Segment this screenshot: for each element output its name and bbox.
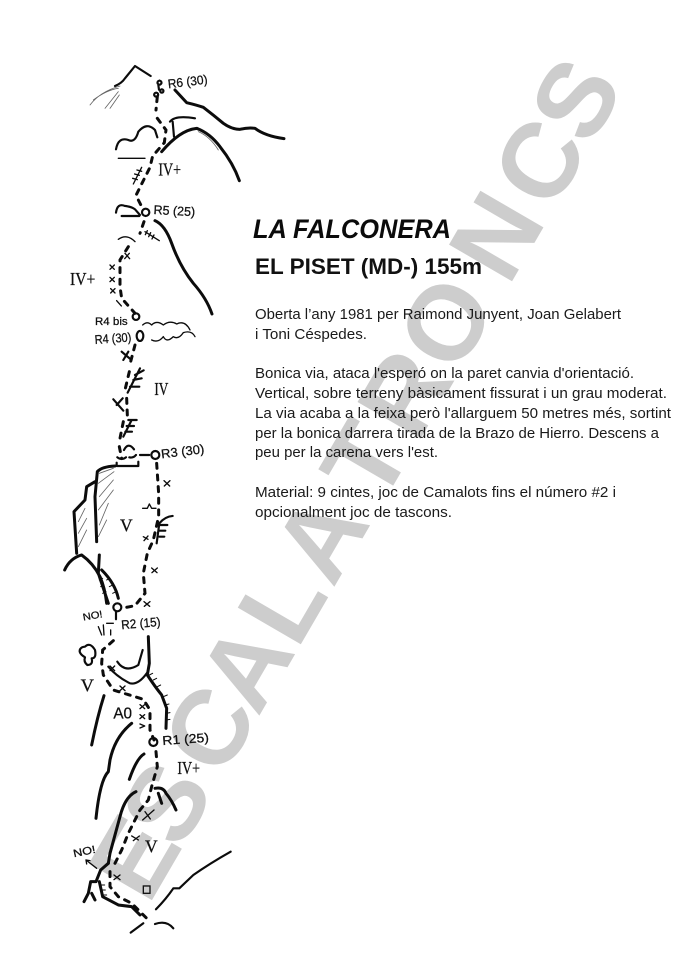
route: R3 to R2 <box>127 463 159 607</box>
topo: lower section <box>72 637 231 933</box>
label: R2 belay: R2 (15) <box>121 615 161 632</box>
left wall lines <box>92 696 144 863</box>
label: R1 belay: R1 (25) <box>162 731 209 748</box>
icon: R2 ring <box>113 603 121 611</box>
icon: summit ridge <box>90 66 151 108</box>
text block: description: Bonica via, ataca l'esperó on la paret canvia d'orientació. <box>255 365 634 382</box>
summit terraces <box>116 117 195 149</box>
label: R4: R4 (30) <box>94 330 132 347</box>
ledge R4 bis <box>143 322 190 330</box>
title: LA FALCONERA <box>253 214 451 244</box>
label: R3 belay: R3 (30) <box>160 442 205 461</box>
wall left of pitch V <box>74 466 115 553</box>
grade label IV+ left: IV+ <box>70 269 95 289</box>
bolts and roofs <box>143 481 170 606</box>
subtitle: EL PISET (MD-) 155m <box>255 254 482 279</box>
route: R1 to start <box>110 752 157 920</box>
tree <box>80 645 95 665</box>
text block: authors: i Toni Céspedes. <box>255 326 367 343</box>
route: R2 to R1 <box>102 641 154 740</box>
text block: authors <box>255 306 622 343</box>
grade label V: V <box>120 516 133 536</box>
small overhang <box>155 788 176 810</box>
icon: R1 ring <box>149 738 157 746</box>
route: R5 to R4 <box>120 222 144 313</box>
label: A0: A0 <box>113 705 132 722</box>
ridge right of R6 <box>175 90 284 139</box>
text block: description: peu per la carena vers l'est. <box>255 444 438 461</box>
text block: material: opcionalment joc de tascons. <box>255 504 452 521</box>
grade label V: V <box>81 676 94 696</box>
route: R4 to R3 <box>119 345 135 458</box>
icon: R5 belay ring <box>142 209 149 216</box>
icon: R6 anchor <box>154 81 163 97</box>
text block: material <box>255 484 616 521</box>
label: R6 belay: R6 (30) <box>167 73 208 91</box>
base ground line <box>156 852 231 909</box>
label: R5 belay: R5 (25) <box>153 203 196 219</box>
cracks and bolts <box>122 352 144 393</box>
text block: description <box>255 365 672 461</box>
grade label IV: IV <box>154 379 168 399</box>
grade label IV+: IV+ <box>177 758 200 778</box>
text block: material: Material: 9 cintes, joc de Camalots fins el número #2 i <box>255 484 616 501</box>
icon: R4 ring <box>137 331 143 341</box>
ledge at R5 <box>116 205 140 216</box>
label: R4 bis: R4 bis <box>95 316 128 328</box>
label: no: NO! <box>82 609 104 624</box>
grade label V: V <box>145 837 158 857</box>
text block: description: per la bonica darrera tirada de la Brazo de Hierro. Descens a <box>255 425 660 442</box>
text block: description: La via acaba a la feixa però l'allarguem 50 metres més, sortint <box>255 405 672 422</box>
label: no: NO! <box>72 844 97 860</box>
grade label IV+: IV+ <box>158 159 181 179</box>
base rocks <box>84 863 140 915</box>
icon: R3 ring <box>151 451 159 459</box>
icon: R4 bis ring <box>133 313 139 320</box>
topo: middle section <box>65 345 205 635</box>
route: R6 to R5 <box>136 97 166 207</box>
wall right of R5 <box>155 221 212 314</box>
bolts <box>110 253 130 306</box>
topo: upper section <box>70 66 284 347</box>
watermark: ESCALATRONCS: ESCALATRONCS <box>66 39 645 918</box>
text block: authors: Oberta l’any 1981 per Raimond Junyent, Joan Gelabert <box>255 306 622 323</box>
ledge at R3 <box>117 446 149 466</box>
roof at pitch <box>147 637 167 728</box>
grade label square <box>143 886 150 893</box>
arrow: no <box>86 860 97 868</box>
text block: description: Vertical, sobre terreny bàsicament fissurat i un grau moderat. <box>255 385 667 402</box>
ledge R4 <box>152 332 195 341</box>
